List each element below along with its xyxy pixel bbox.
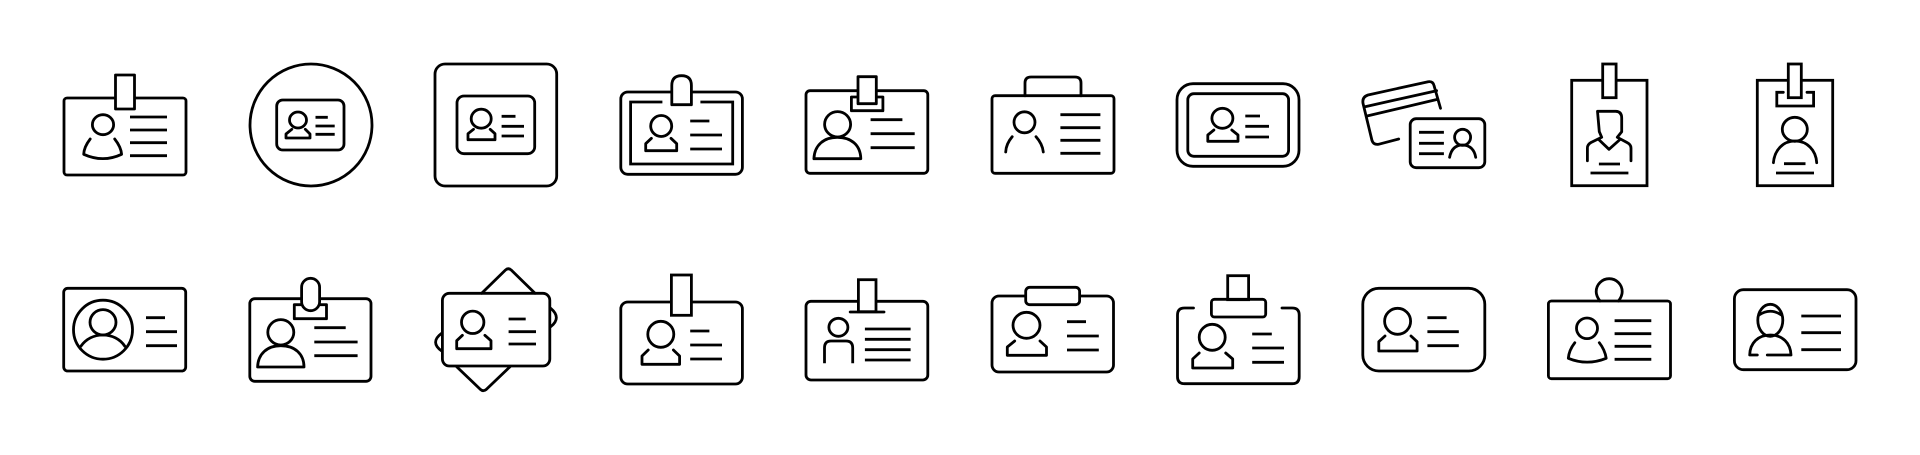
icon: vertical badge with shirt figure <box>1572 64 1647 186</box>
icon: badge with pill holder <box>992 287 1114 372</box>
icon: badge with clip on bar and four lines <box>806 280 928 380</box>
icon: ID card with capped figure <box>1734 290 1856 370</box>
icon: ID card with circular portrait <box>64 288 186 371</box>
icon: badge with double clip <box>806 77 928 173</box>
icon: badge with handle tab <box>992 77 1114 173</box>
icon: badge with clip and bust <box>64 75 186 175</box>
icon: ID card with double border <box>1177 84 1299 166</box>
icon: ID card over rotated card <box>436 269 556 391</box>
icon: open-top badge with T clip <box>1178 276 1299 384</box>
icon: ID card in rounded square <box>435 64 557 186</box>
icon: credit card and ID card <box>1363 82 1485 168</box>
icon: badge with capsule clip <box>250 278 371 381</box>
icon: badge with round ring <box>1548 279 1670 379</box>
icon: rounded ID card <box>1363 288 1485 371</box>
icon: ID card in circle <box>250 64 372 186</box>
icon: vertical badge with clip and holder <box>1757 64 1833 186</box>
icon: badge with tall clip <box>621 275 742 384</box>
icon: framed badge with arched clip <box>621 76 742 174</box>
